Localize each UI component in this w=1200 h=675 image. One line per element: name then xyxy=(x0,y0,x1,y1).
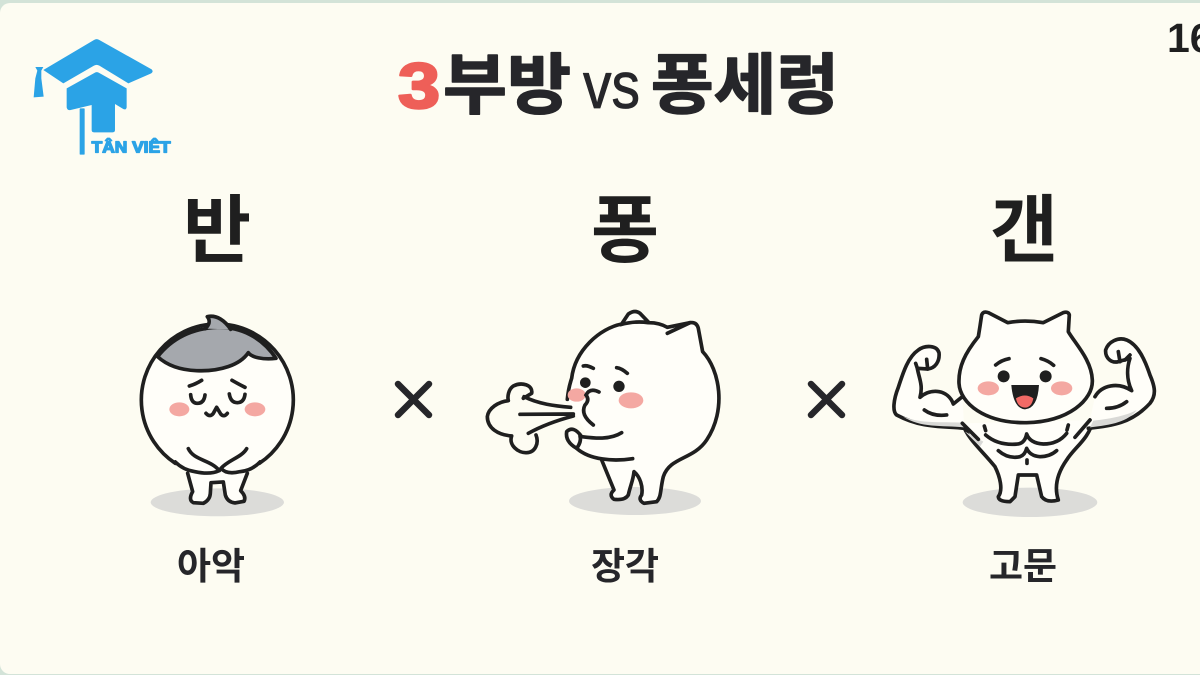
multiply sign 2 xyxy=(811,384,842,415)
character: 갠 muscular cat xyxy=(894,312,1154,517)
logo: Tan Viet xyxy=(34,39,171,157)
title xyxy=(398,32,839,128)
character: 퐁 blowing air xyxy=(487,311,719,515)
label: 고문: 고문 xyxy=(989,536,1057,590)
title: 부방 xyxy=(443,32,571,128)
multiply sign 1 xyxy=(398,384,429,415)
title: vs xyxy=(583,48,640,122)
label: 아악: 아악 xyxy=(177,536,245,590)
torso and legs xyxy=(962,420,1093,502)
character: 반 round character with grey hair xyxy=(141,316,293,516)
title: 3 xyxy=(398,50,440,122)
heading: 갠: 갠 xyxy=(990,171,1058,278)
heading: 퐁: 퐁 xyxy=(591,171,659,278)
abs xyxy=(962,420,1090,463)
title: 퐁세렁 xyxy=(651,32,839,128)
left arm xyxy=(894,347,964,428)
label: 장각: 장각 xyxy=(591,536,659,590)
logo: Tan Viet: TÂN VIÊT xyxy=(92,138,171,157)
right arm xyxy=(1088,339,1154,428)
heading: 반: 반 xyxy=(183,171,251,278)
head xyxy=(959,312,1092,423)
